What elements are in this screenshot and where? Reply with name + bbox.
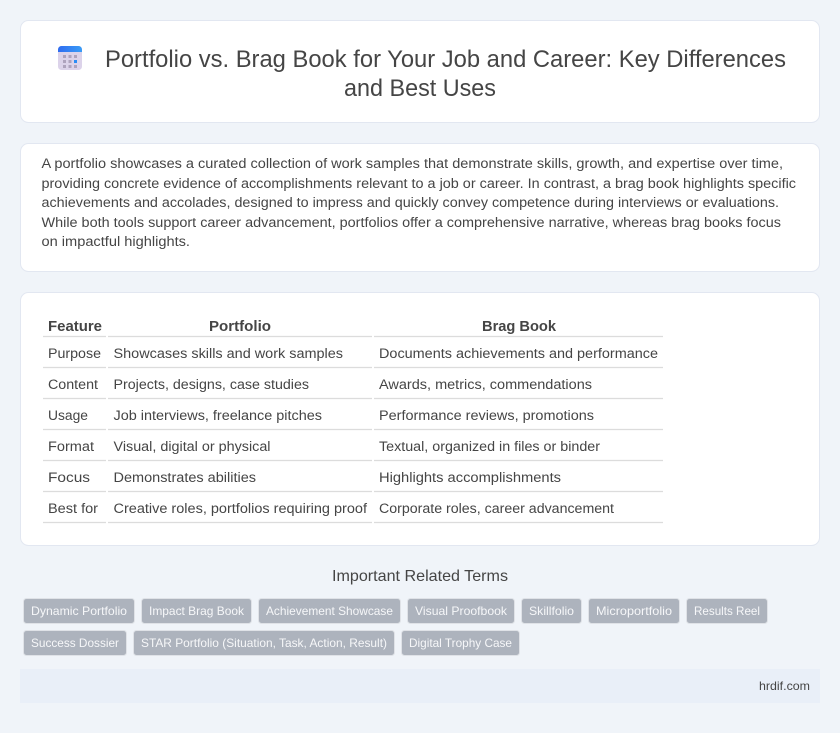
table header: [48, 319, 557, 335]
table row: Content: Projects, designs, case studies: [114, 377, 309, 393]
table row: Focus: Highlights accomplishments: [379, 470, 561, 486]
icon: calendar: [58, 46, 82, 70]
table row: Format: Textual, organized in files or binder: [379, 439, 600, 455]
text block: intro: A portfolio showcases a curated collection of work samples that demonstrate skills, growth, and expertise over time,: [42, 156, 783, 172]
footer: hrdif.com: [759, 679, 810, 693]
table row: Best for: [48, 501, 614, 517]
text block: intro: on impactful highlights.: [42, 234, 190, 250]
table row: Format: [48, 439, 600, 455]
table row: Usage: Job interviews, freelance pitches: [114, 408, 322, 424]
tag: [142, 598, 252, 624]
title: [105, 46, 786, 102]
text block: intro: providing concrete evidence of accomplishments relevant to a job or career. In contrast, a brag book highlights specific: [42, 176, 796, 192]
tag: Results Reel: [694, 604, 760, 618]
footer: [20, 669, 820, 703]
tag: [686, 598, 768, 624]
table row: Usage: Usage: [48, 408, 88, 424]
tag: STAR Portfolio (Situation, Task, Action, Result): [141, 636, 387, 650]
title: Portfolio vs. Brag Book for Your Job and Career: Key Differences: [105, 46, 786, 73]
tag: Skillfolio: [529, 604, 574, 618]
table row: Purpose: Showcases skills and work samples: [114, 346, 343, 362]
table header: Brag Book: [482, 319, 557, 335]
tag: [134, 630, 394, 656]
table row: Purpose: Documents achievements and performance: [379, 346, 658, 362]
tag: [24, 598, 134, 624]
table row: Purpose: Purpose: [48, 346, 101, 362]
tag: Visual Proofbook: [415, 604, 508, 618]
table header: Portfolio: [209, 319, 271, 335]
text block: intro: While both tools support career advancement, portfolios offer a comprehensive narrative, whereas brag books focus: [42, 215, 781, 231]
tag: Achievement Showcase: [266, 604, 393, 618]
tag: [408, 598, 514, 624]
table header: Feature: [48, 319, 102, 335]
heading: related terms: Important Related Terms: [332, 568, 508, 585]
tag: Microportfolio: [596, 604, 672, 618]
tag: [522, 598, 582, 624]
panel: comparison table: [20, 292, 820, 546]
table row: Purpose: [48, 346, 658, 362]
table row: Usage: Performance reviews, promotions: [379, 408, 594, 424]
table row: Focus: Focus: [48, 470, 90, 486]
text block: intro: [42, 156, 796, 250]
panel: title card: [20, 20, 820, 122]
text block: intro: achievements and accolades, designed to impress and quickly convey competence during interviews or evaluations.: [42, 195, 779, 211]
table row: Content: [48, 377, 592, 393]
tag: Success Dossier: [31, 636, 119, 650]
table row: Usage: [48, 408, 594, 424]
tags: related terms: [24, 598, 768, 656]
table row: Format: Format: [48, 439, 94, 455]
tag: [24, 630, 126, 656]
panel: intro paragraph: [20, 144, 820, 272]
table row: Best for: Corporate roles, career advancement: [379, 501, 614, 517]
table row: Focus: [48, 470, 561, 486]
tag: Digital Trophy Case: [409, 636, 512, 650]
tag: [588, 598, 680, 624]
tag: Dynamic Portfolio: [31, 604, 127, 618]
table row: Format: Visual, digital or physical: [114, 439, 270, 455]
table row: Content: Awards, metrics, commendations: [379, 377, 592, 393]
table row: Focus: Demonstrates abilities: [114, 470, 256, 486]
table row: Best for: Creative roles, portfolios requiring proof: [114, 501, 367, 517]
table row: Content: Content: [48, 377, 98, 393]
title: and Best Uses: [344, 75, 496, 102]
table row: Best for: Best for: [48, 501, 98, 517]
tag: [402, 630, 520, 656]
tag: Impact Brag Book: [149, 604, 245, 618]
tag: [258, 598, 400, 624]
